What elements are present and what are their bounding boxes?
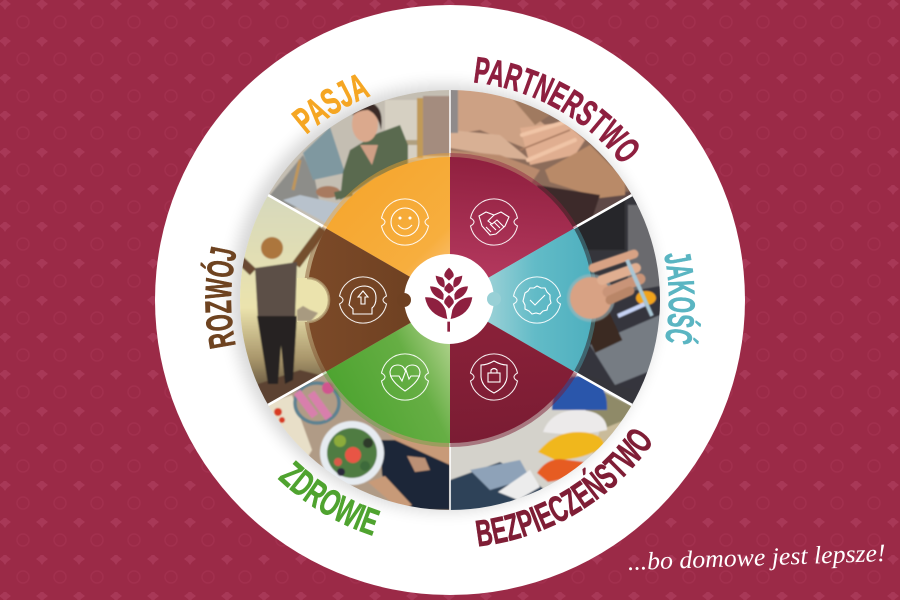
photo: hand with pipette background xyxy=(561,195,660,405)
icon: shield with padlock xyxy=(470,354,518,400)
segment: zdrowie xyxy=(323,300,450,447)
icon: handshake xyxy=(470,199,518,245)
label: zdrowie: ZDROWIE xyxy=(278,460,380,536)
label: pasja: PASJA xyxy=(290,74,371,134)
photo dividers xyxy=(268,90,632,510)
photo: woman at window xyxy=(240,196,344,405)
photo: hard hats xyxy=(450,373,632,510)
photo ring xyxy=(225,85,670,520)
icon: heart with pulse xyxy=(382,354,428,400)
colour wheel xyxy=(303,153,597,447)
segment: partnerstwo xyxy=(450,153,577,300)
white outer circle xyxy=(155,5,745,595)
segment: pasja xyxy=(323,153,450,300)
icon: hop logo xyxy=(425,268,472,332)
icon: head with arrow xyxy=(340,277,386,323)
photo: hands together xyxy=(450,90,632,235)
icon: badge with check xyxy=(514,277,560,323)
segment: jakość xyxy=(450,226,597,374)
hand with pipette xyxy=(567,254,652,322)
centre white puzzle circle xyxy=(397,254,501,344)
label: jakość: JAKOŚĆ xyxy=(664,253,701,344)
segment: rozwój xyxy=(303,226,450,374)
photo shadow xyxy=(231,85,657,511)
icon: smile xyxy=(382,199,428,245)
photo: skipping rope and salad xyxy=(269,373,450,510)
segment: bezpieczeństwo xyxy=(450,300,577,447)
label: rozwój: ROZWÓJ xyxy=(200,246,236,349)
photo: painter woman xyxy=(268,90,450,227)
label: bezpieczeństwo: BEZPIECZEŃSTWO xyxy=(475,429,651,547)
slogan: ...bo domowe jest lepsze! xyxy=(627,540,886,576)
label: partnerstwo: PARTNERSTWO xyxy=(474,56,639,162)
puzzle bump: rozwój photo xyxy=(297,278,329,322)
